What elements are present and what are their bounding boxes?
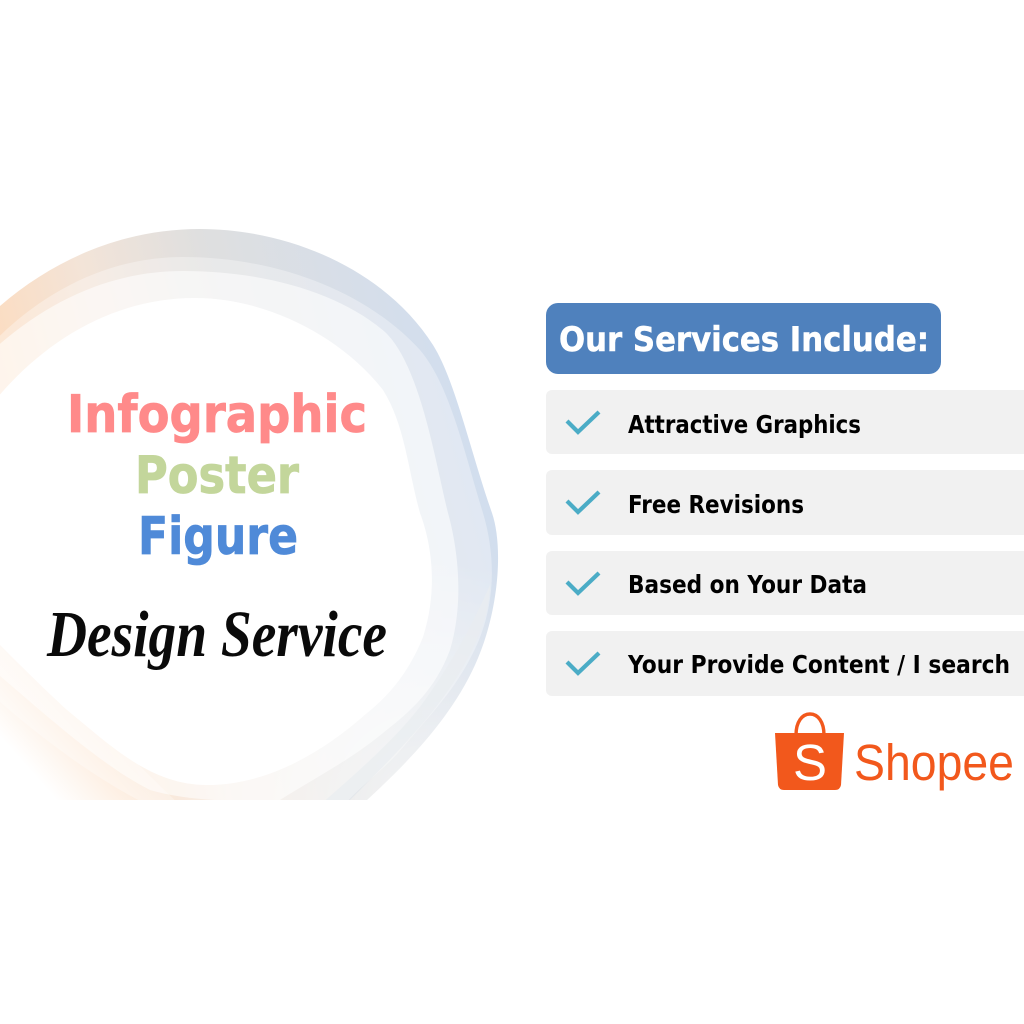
service row: Attractive Graphics <box>546 390 1024 454</box>
circular blob backdrop <box>0 229 498 800</box>
service row: Free Revisions: Free Revisions <box>628 490 804 519</box>
heading: Poster: Poster <box>135 446 299 506</box>
service row: Attractive Graphics: Attractive Graphics <box>628 410 861 439</box>
services header box: Our Services Include: <box>559 320 929 360</box>
icon: shopping bag: S <box>793 734 827 791</box>
service row: Free Revisions <box>546 470 1024 535</box>
icon: shopping bag <box>775 714 844 791</box>
heading: Figure: Figure <box>138 507 298 567</box>
script title: Design Service: Design Service <box>46 598 387 671</box>
Shopee logo <box>775 714 1014 791</box>
service row: Based on Your Data: Based on Your Data <box>628 570 867 599</box>
service row: Based on Your Data <box>546 551 1024 615</box>
service row: Your Provide Content / I search <box>546 631 1024 696</box>
heading: Infographic: Infographic <box>67 385 367 445</box>
services header box <box>546 303 941 374</box>
